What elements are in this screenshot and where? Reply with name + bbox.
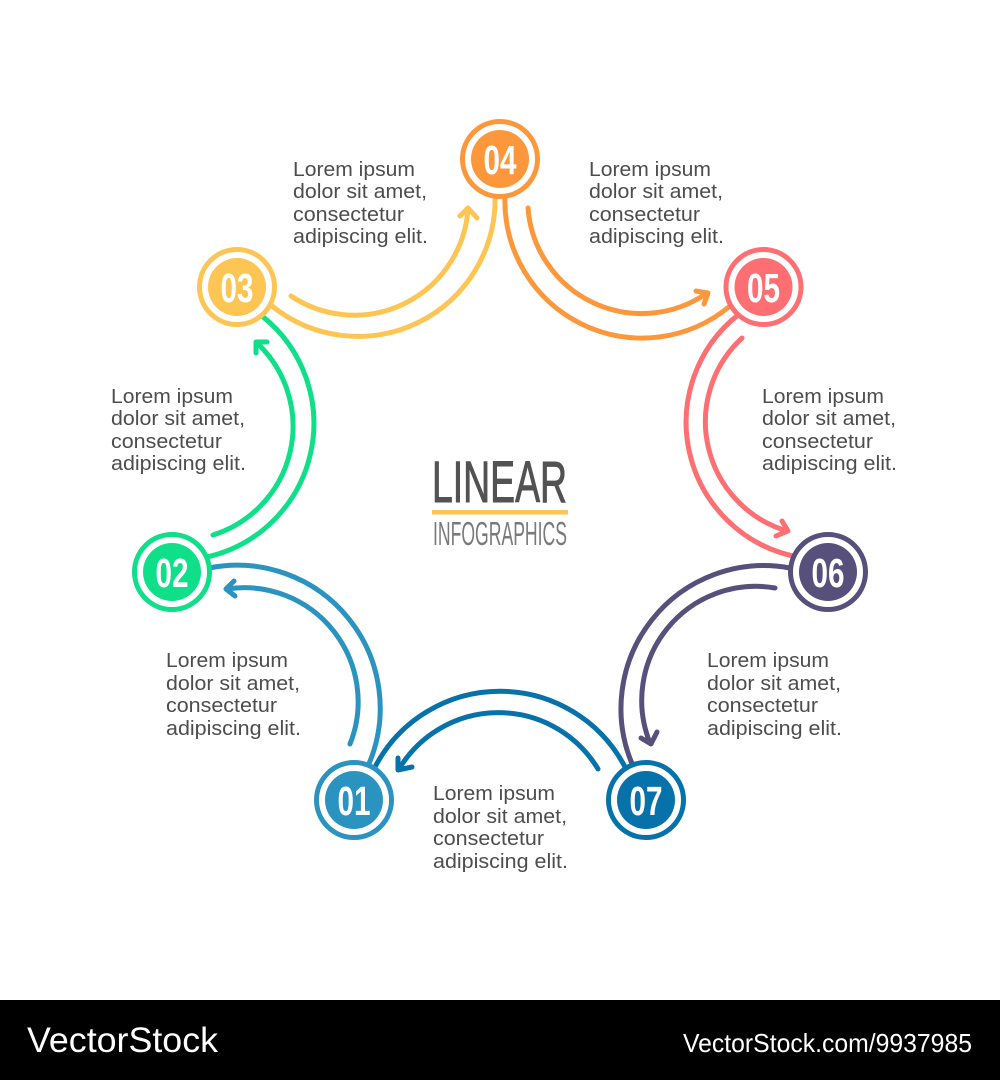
footer bar	[0, 1000, 1000, 1080]
text block: step 03: adipiscing elit.	[293, 226, 428, 248]
footer bar: VectorStock	[27, 1021, 219, 1060]
text block: step 01: dolor sit amet,	[166, 673, 300, 695]
node 03	[200, 250, 274, 324]
node 02: 02	[156, 550, 188, 596]
text block: step 05: consectetur	[762, 431, 873, 453]
text block: step 05	[762, 386, 897, 475]
text block: step 03: Lorem ipsum	[293, 159, 415, 181]
text block: step 02: dolor sit amet,	[111, 408, 245, 430]
center title	[432, 450, 568, 552]
text block: step 04: dolor sit amet,	[589, 181, 723, 203]
node 04: 04	[484, 137, 517, 183]
arrow: step 01 to 02	[209, 565, 380, 766]
node 01: 01	[338, 778, 370, 824]
text block: step 01: Lorem ipsum	[166, 650, 288, 672]
text block: step 01: adipiscing elit.	[166, 718, 301, 740]
text block: step 04: consectetur	[589, 204, 700, 226]
node 06	[790, 534, 866, 610]
text block: step 06: adipiscing elit.	[707, 718, 842, 740]
text block: step 02: consectetur	[111, 431, 222, 453]
text block: step 07: adipiscing elit.	[433, 851, 568, 873]
text block: step 04: adipiscing elit.	[589, 226, 724, 248]
node 04	[462, 122, 538, 196]
node 06: 06	[812, 550, 844, 596]
arrow: step 03 to 04	[272, 196, 495, 336]
node 05: 05	[747, 265, 780, 311]
node 05	[726, 250, 801, 324]
center title: LINEAR	[432, 450, 567, 515]
center title: INFOGRAPHICS	[433, 515, 567, 552]
arrow: step 04 to 05	[505, 196, 730, 338]
arrow: step 05 to 06	[686, 315, 793, 556]
text block: step 04	[589, 159, 724, 248]
text block: step 06: dolor sit amet,	[707, 673, 841, 695]
text block: step 02: Lorem ipsum	[111, 386, 233, 408]
text block: step 05: Lorem ipsum	[762, 386, 884, 408]
text block: step 07	[433, 783, 568, 873]
arrow: step 02 to 03	[207, 316, 314, 557]
node 07: 07	[630, 778, 662, 824]
text block: step 05: adipiscing elit.	[762, 453, 897, 475]
text block: step 06: Lorem ipsum	[707, 650, 829, 672]
arrow: step 06 to 07	[621, 566, 790, 766]
node 01	[316, 762, 392, 838]
text block: step 05: dolor sit amet,	[762, 408, 896, 430]
text block: step 02	[111, 386, 246, 475]
text block: step 03	[293, 159, 428, 248]
text block: step 07: Lorem ipsum	[433, 783, 555, 805]
node 07	[608, 762, 684, 838]
text block: step 03: dolor sit amet,	[293, 181, 427, 203]
node 02	[134, 534, 210, 610]
text block: step 06: consectetur	[707, 695, 818, 717]
text block: step 01: consectetur	[166, 695, 277, 717]
arrow: step 07 to 01	[375, 691, 625, 770]
text block: step 07: dolor sit amet,	[433, 806, 567, 828]
text block: step 06	[707, 650, 842, 740]
text block: step 02: adipiscing elit.	[111, 453, 246, 475]
footer bar: VectorStock.com/9937985	[683, 1028, 972, 1058]
node 03: 03	[220, 265, 254, 311]
text block: step 07: consectetur	[433, 828, 544, 850]
text block: step 01	[166, 650, 301, 740]
text block: step 03: consectetur	[293, 204, 404, 226]
text block: step 04: Lorem ipsum	[589, 159, 711, 181]
